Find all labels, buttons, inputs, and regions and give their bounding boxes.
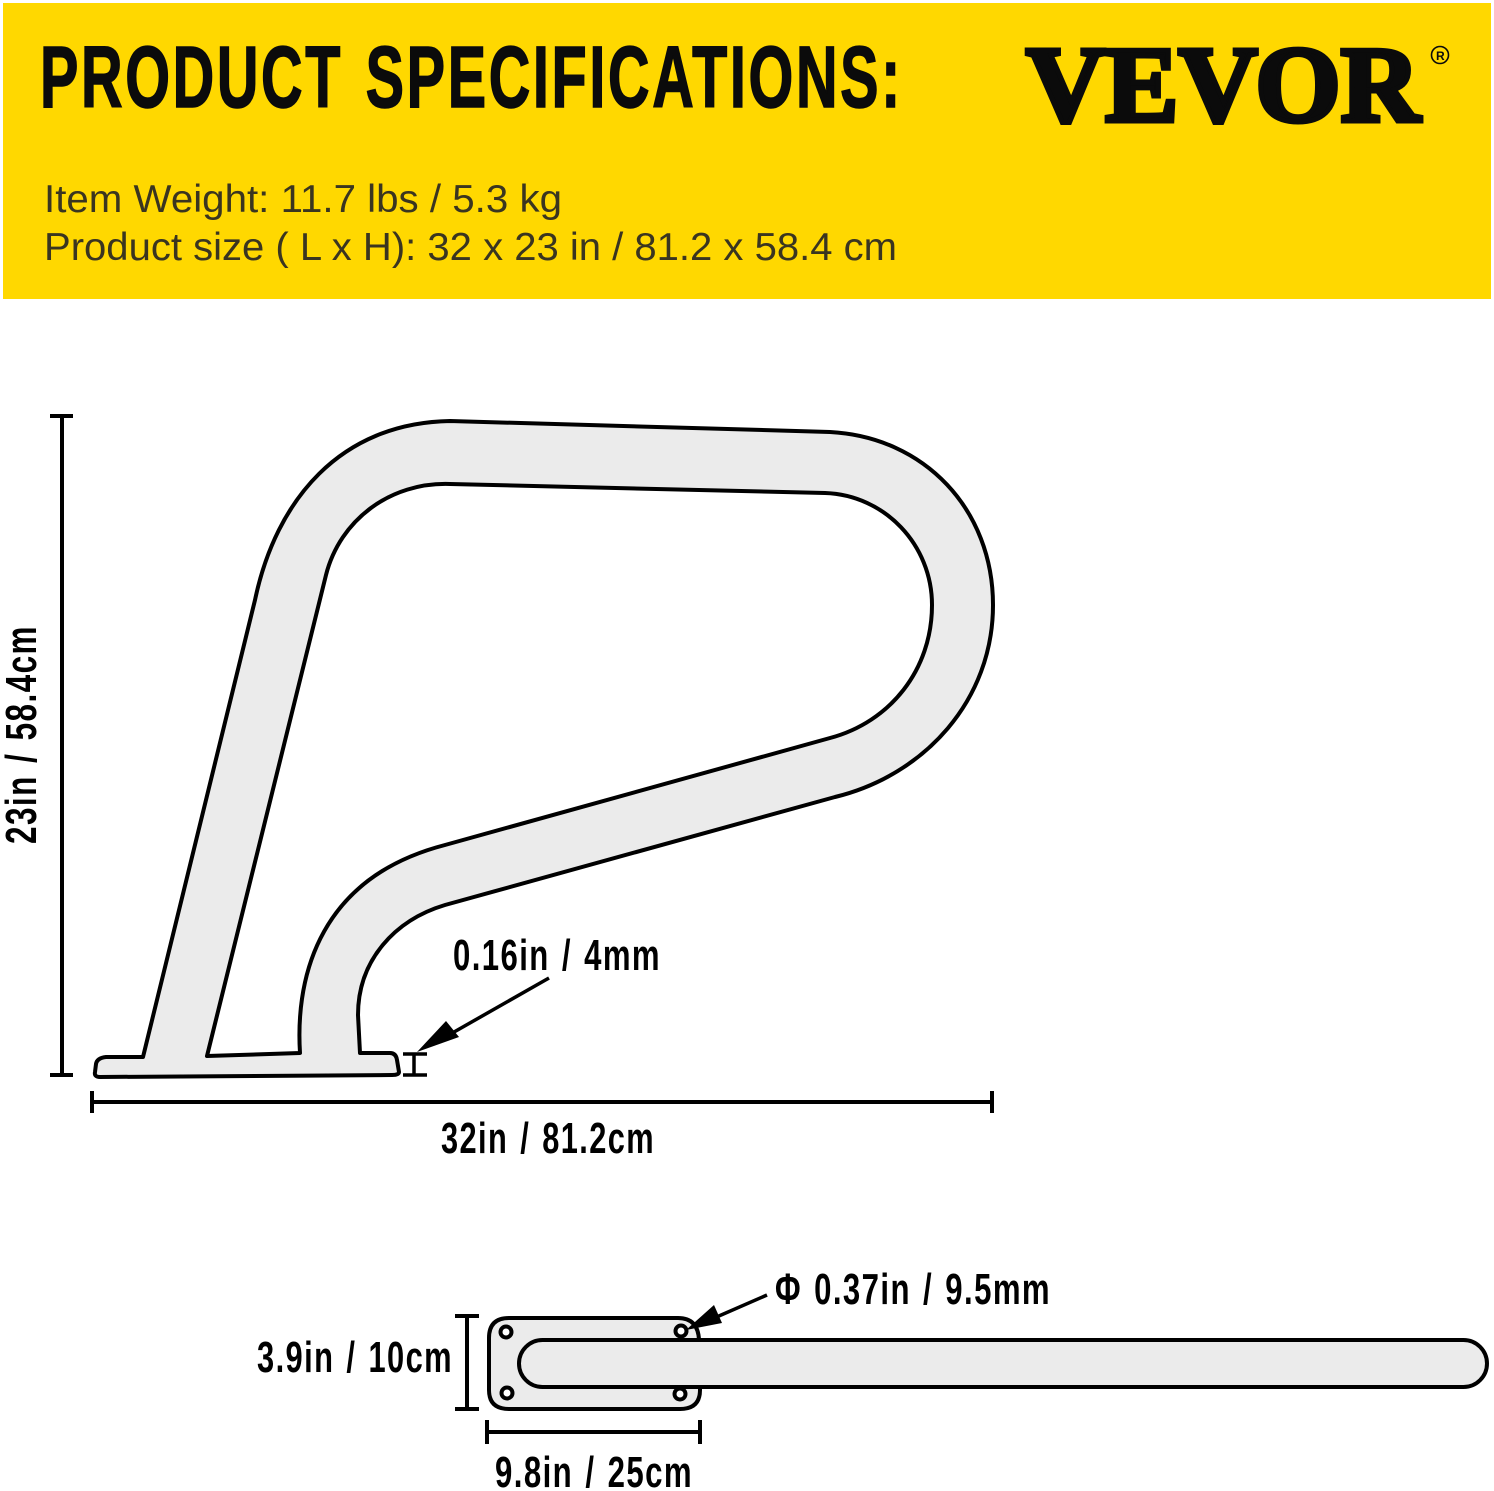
top view: base plate [489,1318,700,1409]
dimension: height [0,416,73,1075]
side view of rail [95,421,993,1077]
plate holes [500,1326,686,1400]
arrow: thickness [417,978,549,1052]
dimension: plate thickness [403,931,661,1075]
label: hole diameter: Φ 0.37in / 9.5mm [775,1265,1051,1314]
top view: rail [519,1340,1487,1387]
logo: VEVOR: VEVOR [1026,26,1421,145]
label: width: 32in / 81.2cm [441,1114,655,1163]
title: PRODUCT SPECIFICATIONS: [40,29,903,126]
label: plate height: 3.9in / 10cm [257,1333,453,1382]
callout: hole diameter [686,1265,1051,1330]
text: product size: Product size ( L x H): 32 x 23 in / 81.2 x 58.4 cm [44,226,897,269]
dimension: plate height [257,1316,479,1409]
logo: VEVOR: R [1436,49,1445,63]
arrow: hole [686,1295,767,1330]
dimension: plate length [487,1420,700,1491]
panel: yellow header [3,3,1491,299]
label: thickness: 0.16in / 4mm [453,931,661,980]
dimension: width [92,1091,992,1163]
text: item weight: Item Weight: 11.7 lbs / 5.3 kg [44,178,562,221]
